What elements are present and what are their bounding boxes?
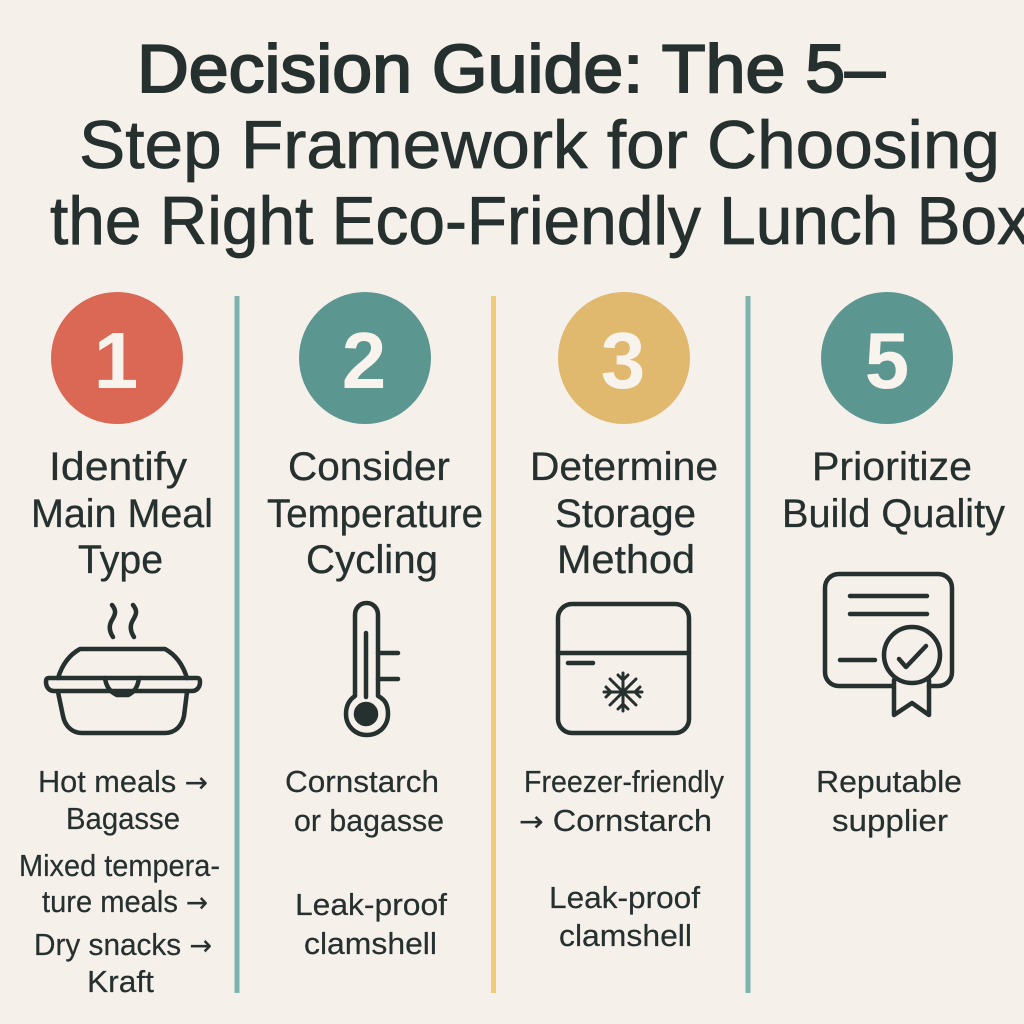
icon: steaming lunch box bbox=[46, 605, 200, 733]
step 2 details: Leak-proof bbox=[295, 887, 447, 922]
icon: freezer container bbox=[558, 604, 689, 733]
step 1 details: Kraft bbox=[87, 964, 154, 999]
step 2 details: or bagasse bbox=[294, 803, 444, 838]
step 5 heading: Prioritize bbox=[812, 445, 972, 489]
panel: step 1 bbox=[19, 292, 220, 999]
step 1 heading bbox=[31, 445, 213, 582]
step 2 details: clamshell bbox=[304, 926, 437, 961]
step 5 heading: Build Quality bbox=[782, 492, 1005, 536]
step 1 number badge: 1 bbox=[94, 316, 138, 405]
step 3 details: Leak-proof bbox=[549, 880, 700, 915]
step 3 heading bbox=[530, 445, 718, 582]
step 2 details: Cornstarch bbox=[285, 764, 439, 799]
step 1 details: Dry snacks → bbox=[34, 927, 212, 962]
step 3 heading: Method bbox=[557, 538, 695, 582]
step 5 heading bbox=[782, 445, 1005, 536]
icon: thermometer bbox=[346, 603, 398, 735]
step 1 details bbox=[19, 764, 220, 999]
step 3 details: Freezer-friendly bbox=[524, 764, 724, 799]
step 3 details: → Cornstarch bbox=[519, 803, 712, 838]
title: Decision Guide: The 5– bbox=[137, 31, 885, 107]
step 2 number badge: 2 bbox=[342, 316, 386, 405]
step 3 details bbox=[519, 764, 724, 953]
step 1 heading: Type bbox=[78, 538, 163, 582]
step 1 heading: Identify bbox=[49, 445, 187, 489]
step 3 heading: Storage bbox=[555, 492, 696, 536]
step 2 number badge bbox=[299, 292, 431, 424]
step 3 number badge bbox=[558, 292, 690, 424]
panel: step 5 bbox=[782, 292, 1005, 838]
panel: step 2 bbox=[267, 292, 483, 961]
step 3 details: clamshell bbox=[559, 918, 692, 953]
panel: step 3 bbox=[519, 292, 724, 953]
step 5 number badge bbox=[821, 292, 953, 424]
step 5 details: supplier bbox=[832, 803, 948, 838]
step 5 number badge: 5 bbox=[865, 316, 909, 405]
step 2 heading bbox=[267, 445, 483, 582]
step 5 details: Reputable bbox=[816, 764, 962, 799]
step 2 heading: Temperature bbox=[267, 492, 483, 536]
step 1 details: Bagasse bbox=[66, 801, 180, 836]
step 5 details bbox=[816, 764, 962, 838]
step 1 number badge bbox=[51, 292, 183, 424]
title bbox=[50, 31, 1024, 259]
step 1 details: Hot meals → bbox=[38, 764, 208, 799]
step 3 number badge: 3 bbox=[601, 316, 645, 405]
step 1 heading: Main Meal bbox=[31, 492, 213, 536]
step 2 heading: Cycling bbox=[306, 538, 438, 582]
step 3 heading: Determine bbox=[530, 445, 718, 489]
step 2 details bbox=[285, 764, 447, 961]
title: Step Framework for Choosing bbox=[79, 107, 1000, 183]
icon: certificate with ribbon bbox=[825, 574, 952, 715]
step 1 details: ture meals → bbox=[42, 884, 208, 919]
step 1 details: Mixed tempera- bbox=[19, 848, 220, 883]
step 2 heading: Consider bbox=[288, 445, 450, 489]
